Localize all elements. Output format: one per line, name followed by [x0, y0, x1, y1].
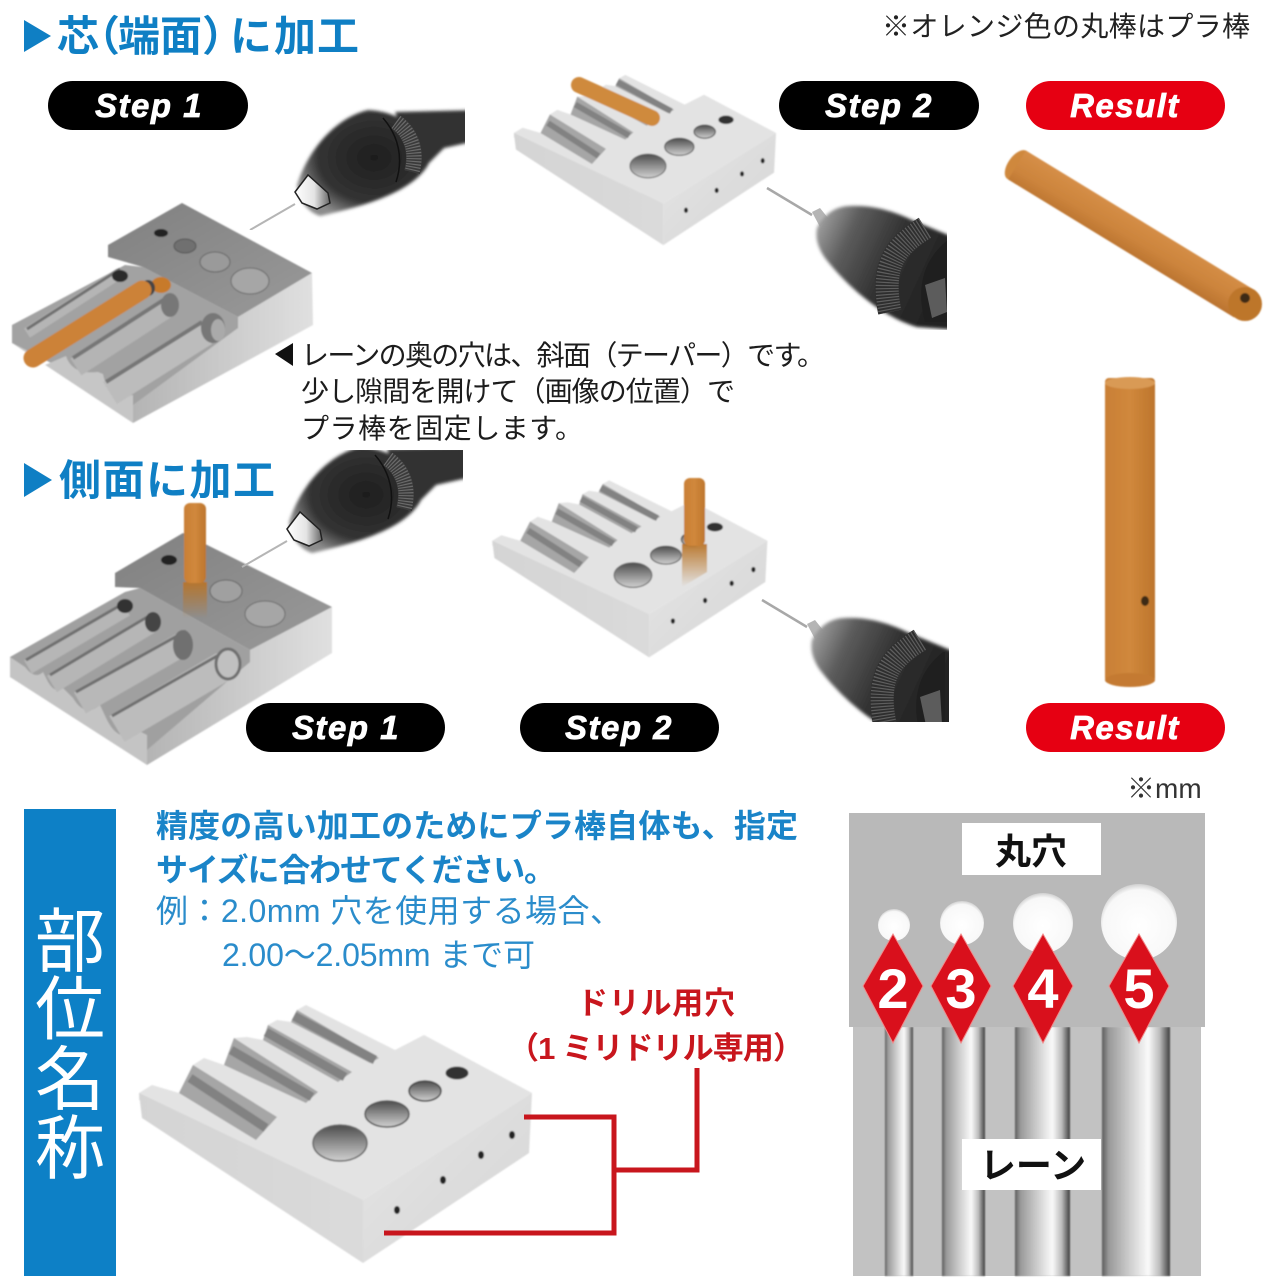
label: lanes [962, 1139, 1101, 1190]
icon: drill, side step 1 [242, 447, 472, 567]
illustration: block with vertical rod, side step 1 [10, 503, 332, 765]
illustration: block with vertical rod, side step 2 [492, 478, 767, 657]
label: round holes: 丸穴 [995, 831, 1067, 872]
panel: part names banner [24, 809, 116, 1276]
label: drill holes for 1mm drill only: （1 ミリドリル専用） [508, 1031, 804, 1066]
badge: Step 1 side [246, 703, 445, 752]
size marker 3: 3 [945, 957, 977, 1020]
icon: drill from upper right, step 1 [250, 110, 480, 230]
illustration: result rod with side hole [1105, 377, 1155, 687]
label: round holes [962, 823, 1101, 875]
text block: precision note: 例：2.0mm 穴を使用する場合、 [156, 893, 622, 929]
orange rod [684, 478, 705, 546]
note: orange rod is a plastic rod: ※オレンジ色の丸棒はプラ棒 [882, 11, 1250, 42]
heading: core end-face processing: 芯（端面）に加工 [57, 13, 359, 60]
text block: precision note: 2.00～2.05mm まで可 [222, 937, 535, 973]
badge: Step 1 top [48, 81, 248, 130]
size marker 5 [1109, 934, 1169, 1043]
orange rod [579, 85, 652, 118]
badge: Step 2 top [779, 81, 979, 130]
badge: Result side [1026, 703, 1225, 752]
orange rod [184, 503, 206, 583]
text block: precision note [156, 808, 798, 973]
label: drill holes for 1mm drill only: ドリル用穴 [577, 986, 735, 1021]
panel: part names banner: 位 [35, 971, 105, 1049]
badge: Result side: Result [1070, 709, 1180, 746]
label: drill holes for 1mm drill only [508, 986, 804, 1066]
badge: Step 1 side: Step 1 [292, 709, 400, 746]
label: lanes: レーン [980, 1145, 1086, 1186]
size marker 2 [863, 934, 923, 1043]
illustration: result rod with end hole [1000, 146, 1262, 321]
heading: side processing: 側面に加工 [59, 457, 275, 504]
size marker 4 [1013, 934, 1073, 1043]
callout: lane taper note: レーンの奥の穴は、斜面（テーパー）です。 [301, 340, 825, 371]
callout: lane taper note: 少し隙間を開けて（画像の位置）で [301, 376, 735, 407]
illustration: block, step 2 [514, 75, 776, 245]
icon: drill, side step 2 [762, 599, 949, 722]
note: units mm: ※mm [1127, 773, 1202, 804]
badge: Step 2 side: Step 2 [565, 709, 673, 746]
badge: Result top: Result [1070, 87, 1180, 124]
size marker 3 [931, 934, 991, 1043]
panel: part names banner: 称 [35, 1110, 105, 1188]
illustration: part block [139, 1005, 532, 1263]
badge: Step 2 side [520, 703, 719, 752]
text block: precision note: サイズに合わせてください。 [156, 852, 556, 888]
badge: Step 2 top: Step 2 [825, 87, 933, 124]
size marker 5: 5 [1123, 957, 1155, 1020]
illustration: block with rod in lane, step 1 [12, 203, 313, 423]
connector lines: drill holes callout [384, 1068, 697, 1233]
size marker 2: 2 [877, 957, 909, 1020]
badge: Step 1 top: Step 1 [95, 87, 203, 124]
callout: lane taper note: プラ棒を固定します。 [301, 413, 583, 444]
callout: lane taper note [275, 340, 825, 444]
text block: precision note: 精度の高い加工のためにプラ棒自体も、指定 [156, 808, 798, 844]
panel: hole and lane diagram [849, 813, 1205, 1276]
orange rod [33, 290, 142, 358]
icon: drill from lower right, step 2 [767, 188, 960, 330]
panel: part names banner: 名 [35, 1041, 105, 1119]
size marker 4: 4 [1027, 957, 1059, 1020]
badge: Result top [1026, 81, 1225, 130]
panel: part names banner: 部 [35, 903, 105, 981]
